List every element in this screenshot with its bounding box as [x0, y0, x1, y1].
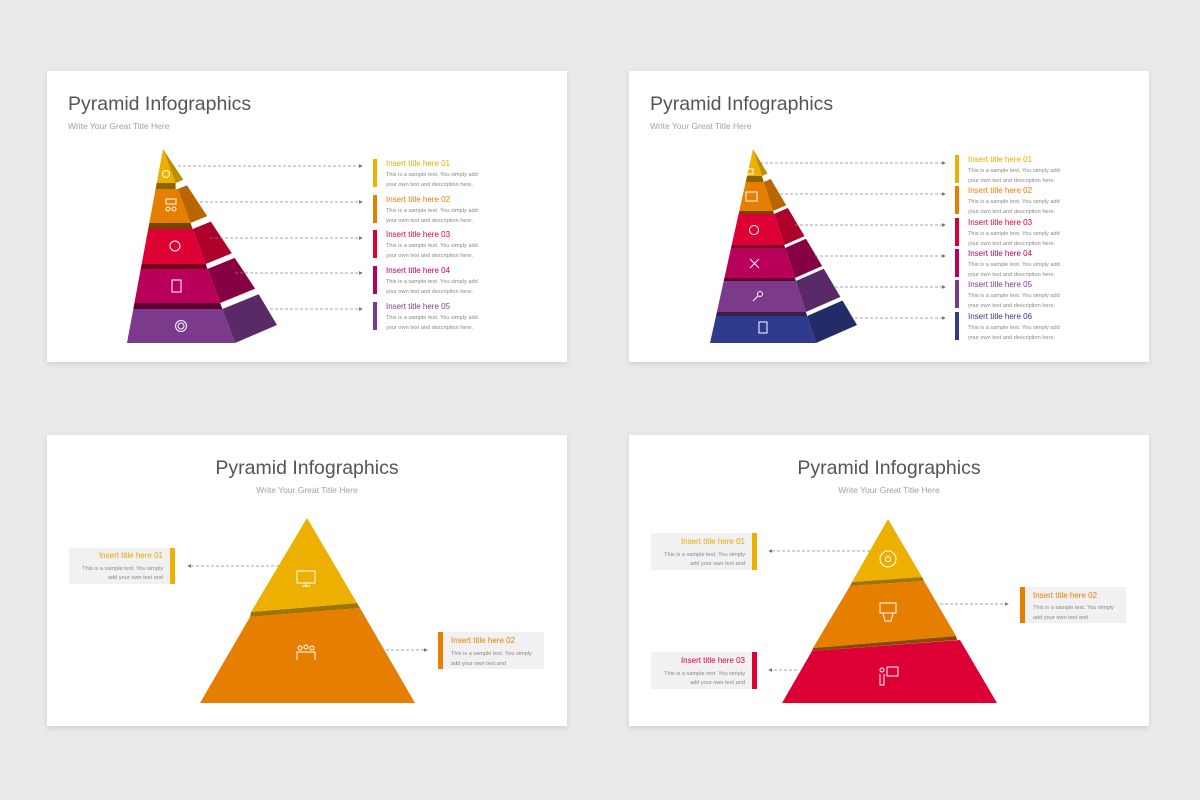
text blocks: slide 1 items: your own text and description here. [386, 253, 474, 259]
callout: slide 3 item 01: This is a sample text. You simply [82, 566, 163, 572]
text blocks: slide 1 items: Insert title here 02 [386, 195, 451, 204]
text blocks: slide 2 items: This is a sample text. You simply add [968, 199, 1060, 205]
text blocks: slide 2 items: This is a sample text. You simply add [968, 231, 1060, 237]
callout: slide 4 item 02: add your own text and [1033, 615, 1088, 621]
text blocks: slide 2 items: Insert title here 05 [968, 280, 1033, 289]
icons: disc, presenter, board [880, 551, 898, 685]
arrow: slide 3 to item 02 [386, 649, 427, 651]
callout: slide 4 item 01 [651, 533, 757, 570]
arrow: slide 4 to item 02 [940, 603, 1008, 605]
callout: slide 3 item 02: Insert title here 02 [451, 636, 516, 645]
subtitle: slide 3: Write Your Great Title Here [256, 485, 358, 495]
icons: tier icons [746, 169, 767, 333]
callout: slide 3 item 02 [438, 632, 544, 669]
callout: slide 4 item 02: This is a sample text. You simply [1033, 605, 1114, 611]
heading: slide 2 title: Pyramid Infographics [650, 93, 833, 115]
chart: 2-level pyramid [200, 518, 415, 703]
text blocks: slide 1 items: Insert title here 05 [386, 302, 451, 311]
arrows: slide 1 connectors [178, 166, 362, 309]
text blocks: slide 1 items: This is a sample text. You simply add [386, 208, 478, 214]
icons: tier icons [162, 170, 186, 332]
text blocks: slide 2 items: This is a sample text. You simply add [968, 168, 1060, 174]
text blocks: slide 1 items: This is a sample text. You simply add [386, 243, 478, 249]
text blocks: slide 2 items: your own text and description here. [968, 335, 1056, 341]
text blocks: slide 1 items [373, 159, 478, 331]
text blocks: slide 2 items: Insert title here 02 [968, 186, 1033, 195]
text blocks: slide 1 items: Insert title here 04 [386, 266, 451, 275]
text blocks: slide 2 items: This is a sample text. You simply add [968, 262, 1060, 268]
panel: slide 3 (2-level pyramid) [47, 435, 567, 726]
callout: slide 3 item 02: add your own text and [451, 661, 506, 667]
text blocks: slide 2 items: This is a sample text. You simply add [968, 293, 1060, 299]
text blocks: slide 2 items: your own text and description here. [968, 209, 1056, 215]
text blocks: slide 2 items: Insert title here 06 [968, 312, 1033, 321]
text blocks: slide 1 items: your own text and description here. [386, 182, 474, 188]
callout: slide 4 item 03: This is a sample text. You simply [664, 671, 745, 677]
arrow: slide 4 to item 03 [769, 669, 797, 671]
text blocks: slide 2 items [955, 155, 1060, 341]
text blocks: slide 1 items: your own text and description here. [386, 218, 474, 224]
text blocks: slide 2 items: Insert title here 04 [968, 249, 1033, 258]
callout: slide 4 item 01: Insert title here 01 [681, 537, 746, 546]
arrows: slide 2 connectors [760, 163, 945, 318]
callout: slide 3 item 02: This is a sample text. You simply [451, 651, 532, 657]
callout: slide 4 item 02: Insert title here 02 [1033, 591, 1098, 600]
icons: monitor and people [297, 571, 315, 660]
text blocks: slide 1 items: your own text and description here. [386, 289, 474, 295]
text blocks: slide 2 items: your own text and description here. [968, 178, 1056, 184]
callout: slide 4 item 01: This is a sample text. You simply [664, 552, 745, 558]
text blocks: slide 1 items: This is a sample text. You simply add [386, 279, 478, 285]
text blocks: slide 2 items: your own text and description here. [968, 272, 1056, 278]
subtitle: slide 1: Write Your Great Title Here [68, 121, 170, 131]
callout: slide 3 item 01: add your own text and [108, 575, 163, 581]
callout: slide 4 item 03 [651, 652, 757, 689]
callout: slide 4 item 03: add your own text and [690, 680, 745, 686]
text blocks: slide 1 items: This is a sample text. You simply add [386, 172, 478, 178]
panel: slide 1 (5-level 3D pyramid) [47, 71, 567, 362]
text blocks: slide 1 items: Insert title here 01 [386, 159, 451, 168]
callout: slide 4 item 02 [1020, 587, 1126, 623]
heading: slide 1 title: Pyramid Infographics [68, 93, 251, 115]
chart: 3D pyramid 5 tiers [127, 149, 277, 343]
text blocks: slide 2 items: your own text and description here. [968, 303, 1056, 309]
callout: slide 4 item 01: add your own text and [690, 561, 745, 567]
text blocks: slide 1 items: This is a sample text. You simply add [386, 315, 478, 321]
text blocks: slide 2 items: This is a sample text. You simply add [968, 325, 1060, 331]
text blocks: slide 1 items: your own text and description here. [386, 325, 474, 331]
callout: slide 3 item 01 [69, 548, 175, 584]
text blocks: slide 2 items: Insert title here 03 [968, 218, 1033, 227]
text blocks: slide 1 items: Insert title here 03 [386, 230, 451, 239]
chart: 3-level pyramid [782, 519, 997, 703]
subtitle: slide 4: Write Your Great Title Here [838, 485, 940, 495]
heading: slide 3 title: Pyramid Infographics [215, 457, 399, 479]
chart: 3D pyramid 6 tiers [710, 149, 857, 343]
arrow: slide 4 to item 01 [769, 550, 870, 552]
callout: slide 3 item 01: Insert title here 01 [99, 551, 164, 560]
arrow: slide 3 to item 01 [188, 565, 279, 567]
text blocks: slide 2 items: Insert title here 01 [968, 155, 1033, 164]
panel: slide 2 (6-level 3D pyramid) [629, 71, 1149, 362]
subtitle: slide 2: Write Your Great Title Here [650, 121, 752, 131]
heading: slide 4 title: Pyramid Infographics [797, 457, 981, 479]
callout: slide 4 item 03: Insert title here 03 [681, 656, 746, 665]
panel: slide 4 (3-level pyramid) [629, 435, 1149, 726]
text blocks: slide 2 items: your own text and description here. [968, 241, 1056, 247]
